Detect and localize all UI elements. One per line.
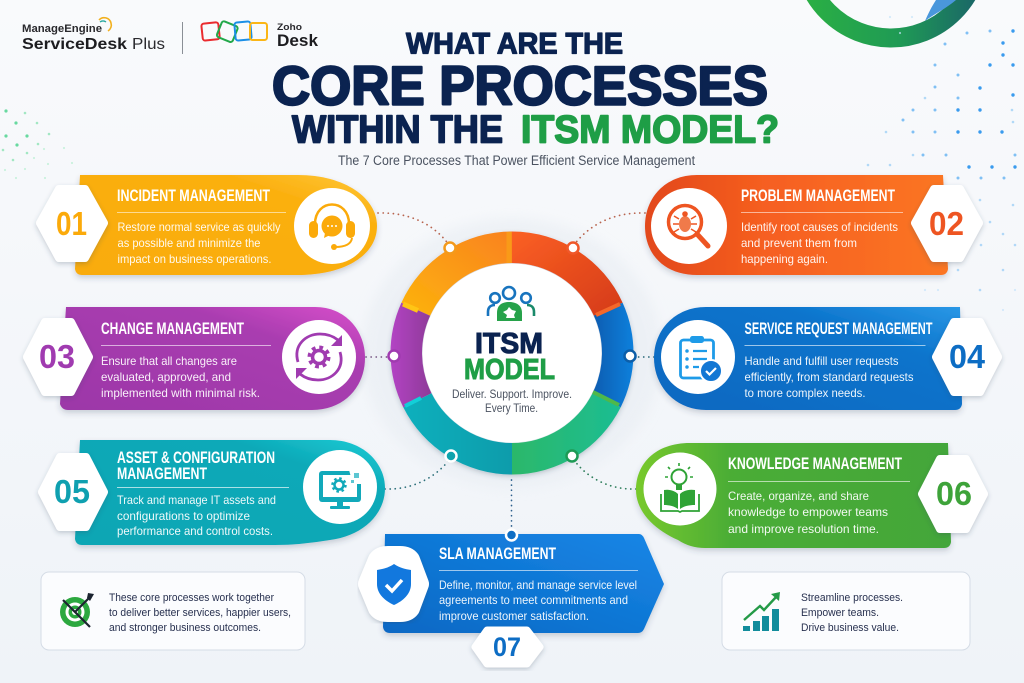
panel: 06 knowledge management — [636, 443, 984, 548]
description: improve customer satisfaction. — [439, 609, 589, 623]
number badge 01 — [40, 189, 104, 258]
description: as possible and minimize the — [118, 236, 261, 250]
logo: Zoho Desk — [201, 21, 319, 50]
logo: ManageEngine ServiceDesk Plus: Plus — [132, 36, 165, 53]
decorative ring top right — [802, 0, 980, 38]
icon: bug magnifier — [651, 188, 727, 264]
ring segment: change — [391, 303, 432, 407]
description: Define, monitor, and manage service level — [439, 578, 637, 592]
description: performance and control costs. — [117, 524, 273, 538]
icon: team — [488, 287, 534, 321]
ring segment: incident — [401, 232, 512, 316]
text: and stronger business outcomes. — [109, 622, 261, 634]
description: efficiently, from standard requests — [744, 370, 914, 384]
description: agreements to meet commitments and — [439, 593, 628, 607]
number badge 07: 07 — [493, 632, 521, 662]
green dot pattern left — [3, 111, 72, 178]
faint halo behind hub — [362, 218, 662, 488]
logo: Zoho Desk: Zoho — [277, 22, 302, 33]
panel: 02 problem management — [645, 175, 979, 275]
blue dot pattern top right — [858, 17, 1015, 310]
number badge 01: 01 — [56, 205, 87, 242]
title: WITHIN THE — [292, 108, 503, 152]
hub tagline: Deliver. Support. Improve. — [452, 389, 572, 401]
number badge 02: 02 — [929, 205, 964, 242]
description — [744, 354, 914, 400]
ring segment: service request — [592, 303, 633, 407]
panel: 01 incident management — [40, 175, 377, 275]
callout: business value — [722, 572, 970, 650]
number badge 07 — [475, 630, 540, 664]
heading: KNOWLEDGE MANAGEMENT — [728, 454, 902, 473]
number badge 06: 06 — [936, 475, 972, 512]
hub centre — [422, 264, 602, 442]
text: Drive business value. — [801, 622, 899, 634]
number badge 05: 05 — [54, 473, 90, 510]
description — [101, 354, 260, 400]
logo: Zoho Desk: Desk — [277, 31, 319, 50]
icon: clipboard — [661, 320, 735, 394]
ring segment: knowledge — [512, 393, 621, 474]
logo: ManageEngine ServiceDesk Plus: ServiceDesk — [22, 36, 127, 53]
description: knowledge to empower teams — [728, 505, 888, 519]
connectors — [366, 213, 654, 530]
description: Handle and fulfill user requests — [744, 354, 899, 368]
icon: growth chart — [743, 592, 780, 631]
description — [439, 578, 637, 623]
description: Ensure that all changes are — [101, 354, 237, 368]
text: Empower teams. — [801, 607, 879, 619]
description: Create, organize, and share — [728, 489, 869, 503]
text: These core processes work together — [109, 592, 274, 604]
panel: 07 SLA management — [368, 534, 664, 664]
icon: target — [60, 593, 94, 627]
title: ITSM MODEL? — [521, 108, 779, 152]
description: and improve resolution time. — [728, 522, 879, 536]
description: evaluated, approved, and — [101, 370, 231, 384]
number badge 03: 03 — [39, 338, 75, 375]
heading: ASSET & CONFIGURATION — [117, 448, 275, 467]
hub tagline — [452, 389, 572, 415]
heading: CHANGE MANAGEMENT — [101, 319, 244, 338]
subtitle: The 7 Core Processes That Power Efficient Service Management — [338, 153, 695, 168]
hub title: ITSM — [475, 328, 543, 360]
connector nodes — [388, 242, 636, 540]
panel: 03 change management — [27, 307, 365, 410]
hub tagline: Every Time. — [485, 403, 538, 415]
title — [272, 28, 779, 152]
number badge 02 — [915, 189, 979, 258]
ring segment: problem — [512, 232, 623, 316]
description: implemented with minimal risk. — [101, 386, 260, 400]
panel: 04 service request management — [654, 307, 998, 410]
description: Track and manage IT assets and — [117, 493, 276, 507]
heading: MANAGEMENT — [117, 464, 207, 483]
description — [728, 489, 888, 536]
title: CORE PROCESSES — [272, 54, 768, 116]
description: Restore normal service as quickly — [118, 220, 281, 234]
heading: INCIDENT MANAGEMENT — [117, 186, 270, 205]
panel: 05 asset and configuration management — [42, 440, 385, 545]
text — [801, 592, 903, 634]
ring segment: asset — [403, 393, 512, 474]
icon: shield — [368, 556, 419, 612]
number badge 06 — [922, 459, 984, 529]
number badge 04 — [936, 322, 998, 392]
description: impact on business operations. — [118, 252, 272, 266]
description: and prevent them from — [741, 236, 857, 250]
logo: ManageEngine ServiceDesk Plus — [22, 18, 165, 53]
description — [117, 493, 276, 538]
text — [109, 592, 291, 634]
title: WHAT ARE THE — [406, 28, 623, 60]
text: to deliver better services, happier users, — [109, 607, 291, 619]
number badge 05 — [42, 457, 104, 527]
description: Identify root causes of incidents — [741, 220, 898, 234]
description: configurations to optimize — [117, 509, 250, 523]
description: to more complex needs. — [744, 386, 866, 400]
icon: change cycle — [282, 320, 356, 394]
number badge 03 — [27, 322, 89, 392]
icon: headset — [294, 188, 370, 264]
callout: target summary — [41, 572, 305, 650]
number badge 04: 04 — [949, 338, 986, 375]
heading: PROBLEM MANAGEMENT — [741, 186, 895, 205]
description — [741, 220, 898, 266]
logo: ManageEngine ServiceDesk Plus: ManageEngine — [22, 23, 102, 35]
heading: SLA MANAGEMENT — [439, 544, 556, 563]
icon: book and bulb — [644, 452, 716, 526]
text: Streamline processes. — [801, 592, 903, 604]
central ring chart — [391, 232, 633, 474]
heading — [117, 448, 275, 483]
hub centre: MODEL — [464, 354, 555, 386]
description: happening again. — [741, 252, 828, 266]
icon: monitor — [303, 450, 377, 524]
description — [118, 220, 281, 266]
